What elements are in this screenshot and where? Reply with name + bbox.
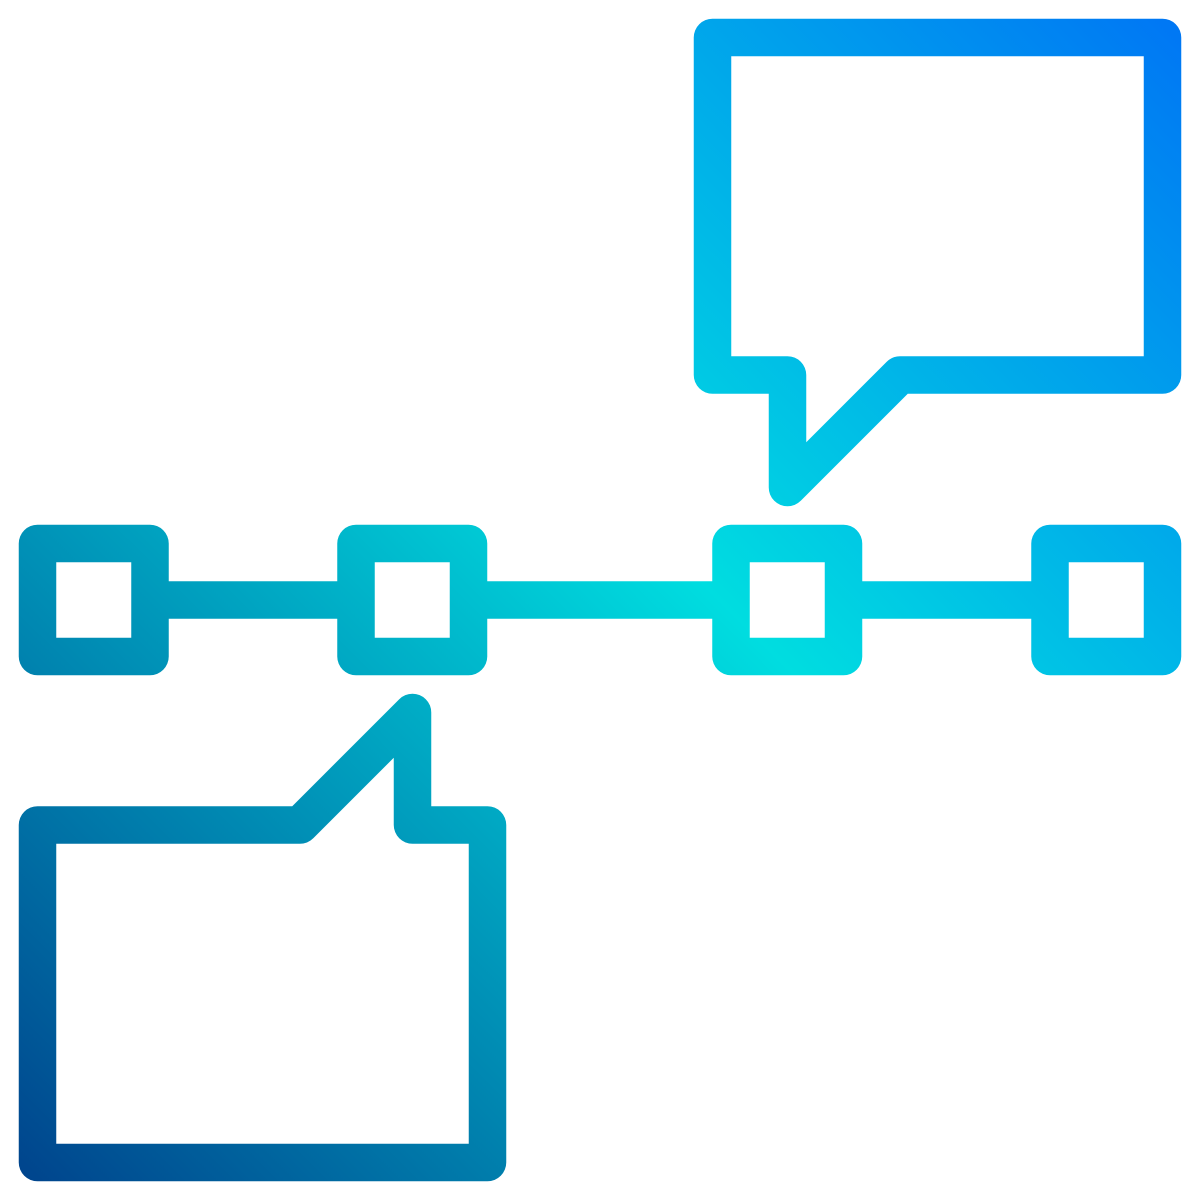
timeline node 1 xyxy=(38,544,150,656)
timeline node 4 xyxy=(1050,544,1162,656)
connector lines xyxy=(150,581,1050,619)
speech bubble: bottom left xyxy=(38,712,488,1162)
timeline node 3 xyxy=(731,544,844,656)
timeline node 2 xyxy=(356,544,468,656)
speech bubble: top right xyxy=(712,38,1162,488)
